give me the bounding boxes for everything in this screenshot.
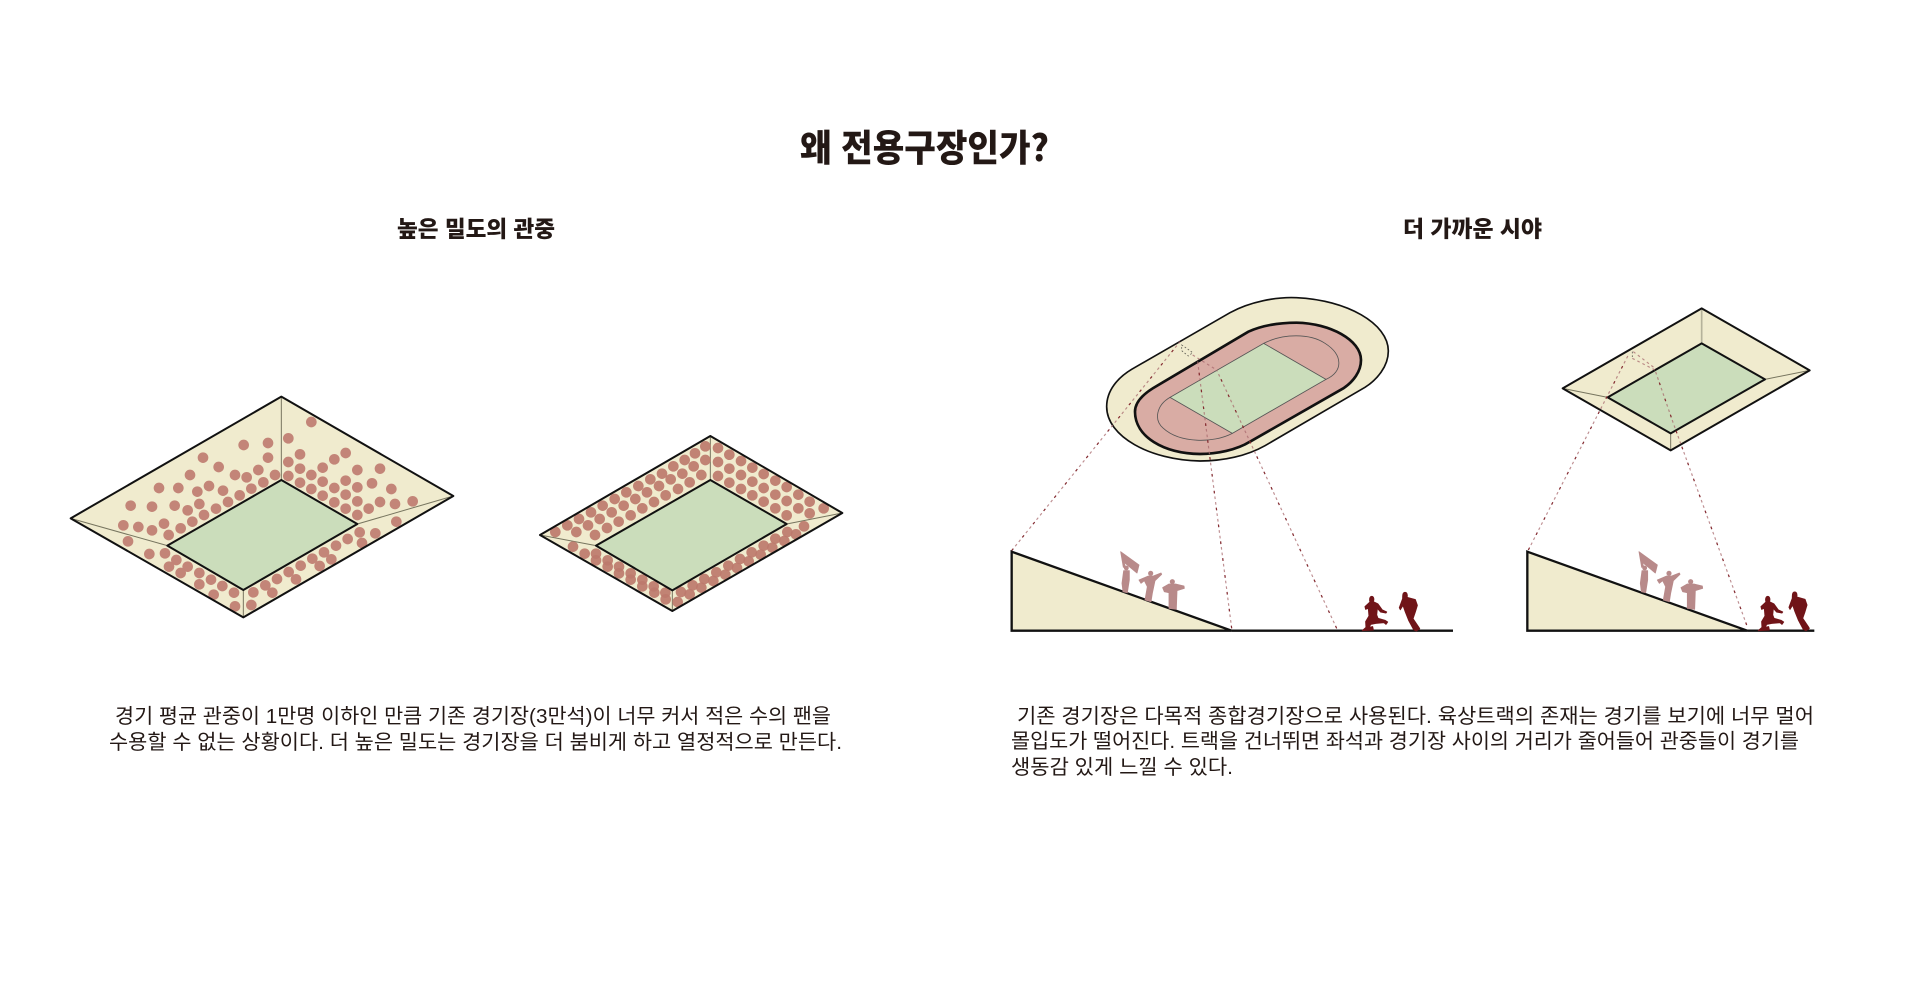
text block: sightline explanation: 기존 경기장은 다목적 종합경기장으로 사용된다. 육상트랙의 존재는 경기를 보기에 너무 멀어 <box>1017 705 1814 728</box>
icon: rectangular stadium <box>1563 308 1810 450</box>
heading: closer view: 더 가까운 시야 <box>1403 212 1542 244</box>
text block: density explanation <box>109 705 842 754</box>
icon: players <box>1758 592 1809 631</box>
icon: fans <box>1639 552 1703 609</box>
sparse crowd dots <box>118 417 418 612</box>
icon: players <box>1362 592 1420 631</box>
seating slope and ground <box>1527 552 1814 631</box>
icon: oval stadium with running track <box>1107 298 1388 461</box>
text block: sightline explanation: 몰입도가 떨어진다. 트랙을 건너뛰면 좌석과 경기장 사이의 거리가 줄어들어 관중들이 경기를 <box>1011 730 1799 753</box>
text block: sightline explanation: 생동감 있게 느낄 수 있다. <box>1011 756 1233 779</box>
seating slope and ground <box>1012 552 1453 631</box>
icon: fans <box>1121 552 1184 609</box>
sightlines <box>1012 342 1337 628</box>
text block: density explanation: 수용할 수 없는 상황이다. 더 높은 밀도는 경기장을 더 붐비게 하고 열정적으로 만든다. <box>109 731 842 754</box>
diagram: current stadium with sparse crowd <box>71 397 453 617</box>
text block: density explanation: 경기 평균 관중이 1만명 이하인 만큼 기존 경기장(3만석)이 너무 커서 적은 수의 팬을 <box>115 705 831 728</box>
diagram: dedicated stadium sightline <box>1527 308 1814 631</box>
diagram: track stadium sightline <box>1012 298 1453 631</box>
title: 왜 전용구장인가? <box>800 118 1049 172</box>
diagram: dedicated stadium with dense crowd <box>540 436 842 611</box>
sightlines <box>1528 352 1747 625</box>
heading: high density crowd: 높은 밀도의 관중 <box>397 212 555 244</box>
text block: sightline explanation <box>1011 705 1814 779</box>
dense crowd dots <box>550 441 829 607</box>
